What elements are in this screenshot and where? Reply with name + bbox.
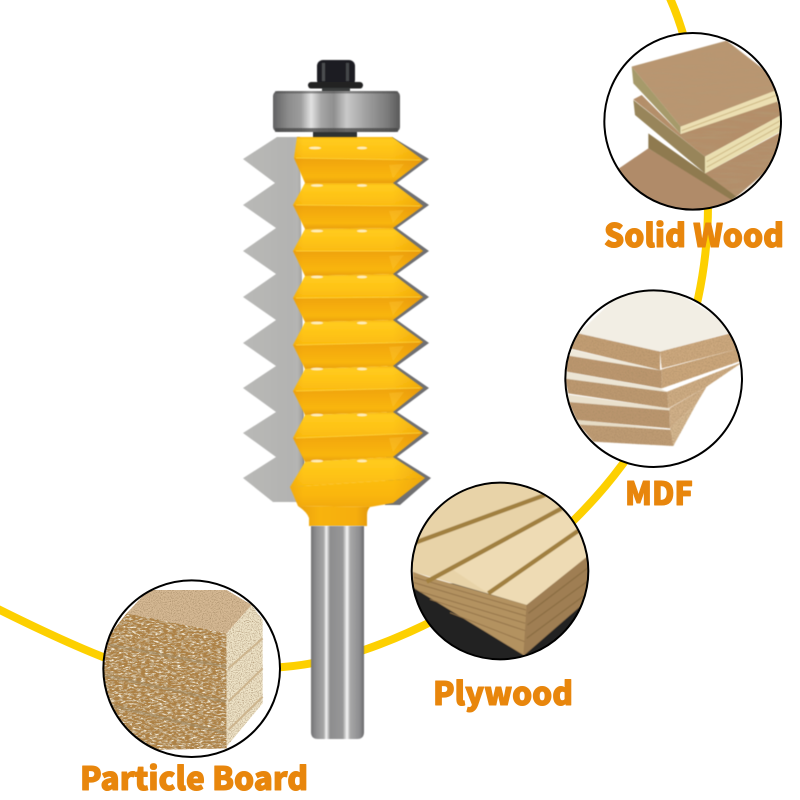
- particle board photo: [90, 580, 280, 757]
- right blade teeth: [385, 137, 431, 505]
- panel: solid wood: [604, 33, 790, 257]
- router bit: [243, 60, 431, 739]
- MDF photo: [565, 287, 743, 467]
- solid wood label: Solid Wood: [604, 211, 784, 257]
- panel: plywood: [410, 482, 590, 712]
- ridge lines: [296, 158, 420, 438]
- shank: [311, 526, 364, 739]
- right facets: [389, 164, 404, 452]
- bolt: [308, 60, 363, 92]
- yellow cutter body: [290, 137, 425, 526]
- panel: particle board: [80, 580, 308, 800]
- highlights: [309, 147, 367, 462]
- panel: MDF: [565, 287, 743, 515]
- bearing: [273, 91, 400, 139]
- particle board label: Particle Board: [80, 754, 308, 800]
- plywood label: Plywood: [433, 669, 573, 715]
- plywood photo: [410, 482, 590, 660]
- solid wood photo: [604, 33, 790, 220]
- left blade teeth: [243, 137, 305, 502]
- collar: [298, 506, 370, 526]
- MDF label: MDF: [625, 469, 693, 515]
- lower cone: [290, 478, 425, 507]
- yellow connecting curve: [0, 0, 708, 671]
- side shading: [290, 137, 425, 506]
